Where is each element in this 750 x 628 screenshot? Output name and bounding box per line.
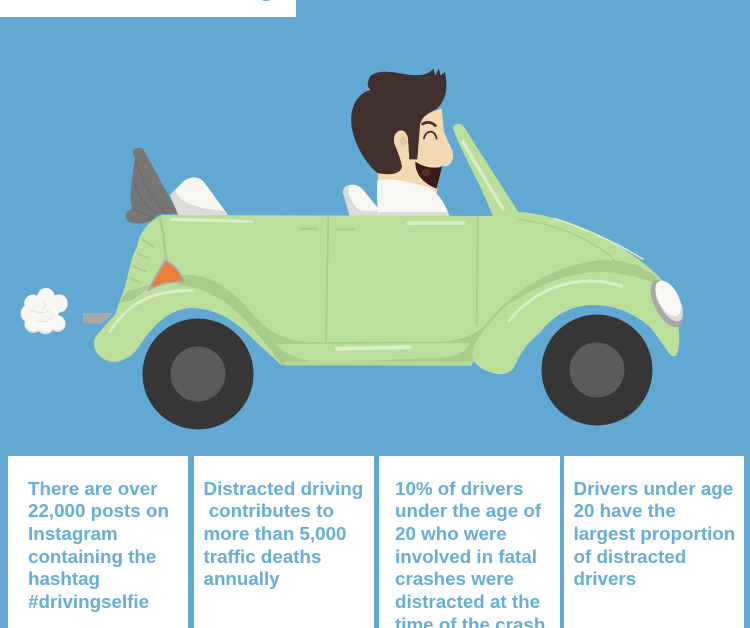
door sill: [275, 343, 470, 362]
rear wedge shadow: [118, 285, 150, 303]
card: largest proportion fact: Drivers under age 20 have the largest proportion of distracted drivers: [574, 478, 735, 589]
driver: [351, 69, 453, 217]
rear tail light: [148, 261, 183, 290]
card: Instagram posts fact: [8, 456, 188, 628]
smiling eye: [424, 132, 437, 139]
card: largest proportion fact: [564, 456, 744, 628]
ear: [394, 130, 408, 150]
lower sill strip: [285, 361, 472, 366]
body shading band: [175, 260, 660, 366]
headlight: [644, 274, 691, 332]
shirt: [377, 180, 450, 217]
rear top highlight: [172, 219, 252, 222]
door and sill highlights: [337, 223, 463, 349]
top white title panel: [0, 0, 296, 16]
rear wheel: [142, 318, 254, 430]
rear panel crease: [159, 217, 167, 260]
illustration: man driving a green convertible: [20, 68, 683, 430]
eyebrow: [423, 122, 435, 126]
hair: [351, 69, 446, 174]
rear fender: [94, 285, 282, 366]
windshield highlight: [463, 142, 503, 209]
hood highlight: [553, 218, 643, 259]
side vents: [130, 240, 153, 282]
card: traffic deaths fact: [194, 456, 374, 628]
hood crease: [518, 219, 615, 261]
rear seat headrest: [170, 177, 229, 216]
neck and face skin: [377, 108, 453, 193]
car body: [115, 212, 670, 366]
windshield: [453, 124, 519, 217]
folded roof creases: [132, 160, 167, 218]
front fender highlight: [509, 281, 622, 321]
card: Instagram posts fact: There are over 22,000 posts on Instagram containing the hashtag #drivingselfie: [28, 478, 169, 612]
exhaust pipe: [83, 313, 114, 324]
door handles: [300, 225, 355, 233]
driver front seat: [343, 185, 381, 217]
body details: [110, 217, 310, 332]
mouth with beard: [415, 162, 442, 189]
exhaust smoke cloud: [21, 288, 68, 334]
rear fender highlight: [110, 291, 192, 332]
rear door handle: [299, 225, 310, 232]
card: traffic deaths fact: Distracted driving contributes to more than 5,000 traffic deaths annually: [204, 478, 363, 589]
folded convertible roof: [126, 148, 178, 223]
front fender: [472, 272, 679, 374]
front wheel: [542, 314, 652, 426]
door seams: [326, 217, 478, 343]
